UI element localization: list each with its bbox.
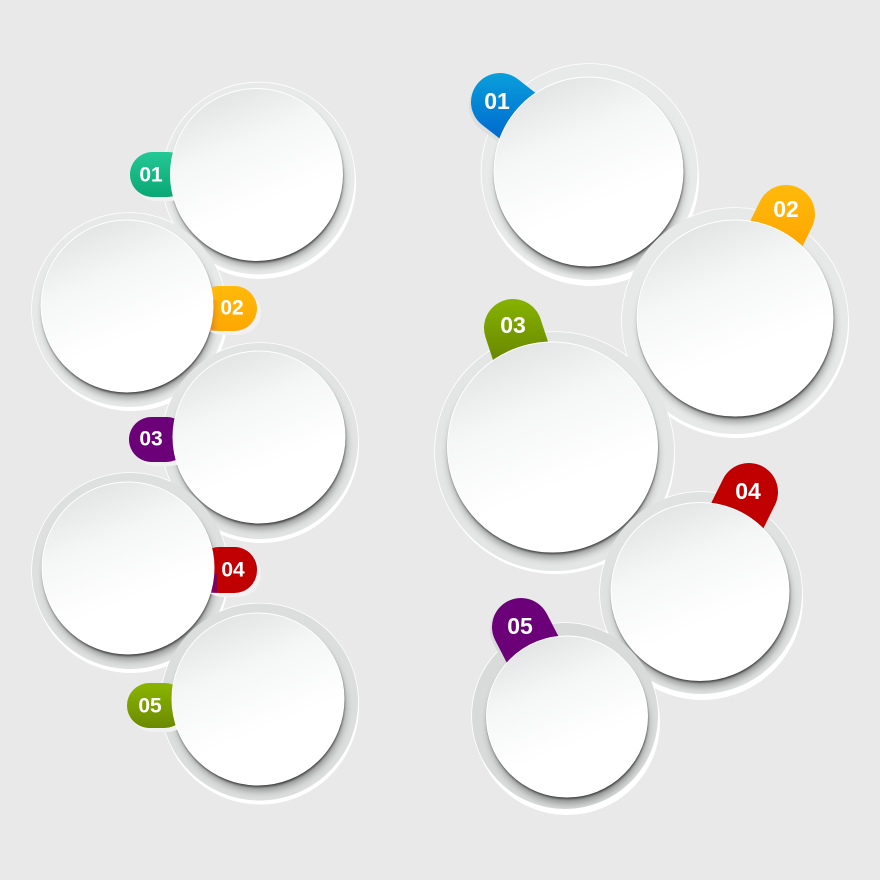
tag right 05: [507, 613, 567, 719]
shadow left 3: [174, 353, 346, 529]
ring right 2: [622, 208, 848, 434]
tag right 02: [735, 196, 799, 318]
tag right 03: [500, 312, 552, 447]
circle panel right 3: [448, 342, 658, 552]
tag left 01: 01: [139, 164, 163, 186]
tag right 05: 05: [507, 613, 533, 639]
tag left 03: [129, 417, 193, 466]
shadow right 4: [612, 504, 790, 687]
tag left 03: 03: [139, 428, 163, 450]
tag right 04: [700, 478, 761, 591]
ring left 2: [32, 213, 226, 407]
shadow right 5: [487, 638, 648, 804]
circle panel left 5: [172, 613, 344, 785]
circle panel right 5: [486, 636, 648, 797]
tag right 03: 03: [500, 312, 526, 338]
shadow right 3: [448, 344, 658, 558]
tag left 05: [127, 683, 190, 732]
rings and shadows: right column: [435, 64, 848, 809]
circle panel left 4: [42, 482, 214, 654]
circle panel right 2: [637, 220, 833, 416]
tag right 04: 04: [735, 478, 761, 504]
ring right 5: [472, 623, 658, 809]
shadow left 5: [172, 615, 345, 791]
tag left 02: 02: [220, 296, 244, 320]
shadow left 1: [171, 90, 343, 266]
white ring rims and lower crescents: [31, 63, 849, 815]
circle panel right 1: [494, 77, 683, 266]
ring right 1: [482, 64, 698, 280]
ring right 4: [600, 492, 802, 694]
circle panel left 1: [170, 88, 342, 260]
shadow left 4: [42, 484, 215, 660]
tag left 04: [197, 547, 261, 597]
rings and shadows: left column: [32, 82, 358, 800]
ring left 3: [162, 343, 358, 539]
ring left 1: [162, 82, 354, 274]
tag left 04: 04: [221, 558, 245, 582]
tag right 02: 02: [773, 196, 799, 222]
tag left 01: [130, 152, 193, 201]
shadow left 2: [42, 222, 214, 398]
circle panel right 4: [611, 502, 789, 680]
tag left 02: [197, 286, 261, 335]
tag right 01: 01: [484, 88, 510, 114]
tag right 01: [484, 88, 591, 175]
tag left 05: 05: [138, 694, 162, 718]
ring right 3: [435, 332, 674, 571]
circle panel left 2: [41, 220, 213, 392]
ring left 5: [161, 604, 358, 800]
shadow right 2: [638, 222, 834, 422]
circle panel left 3: [173, 351, 345, 523]
ring left 4: [32, 473, 228, 669]
shadow right 1: [494, 79, 684, 272]
